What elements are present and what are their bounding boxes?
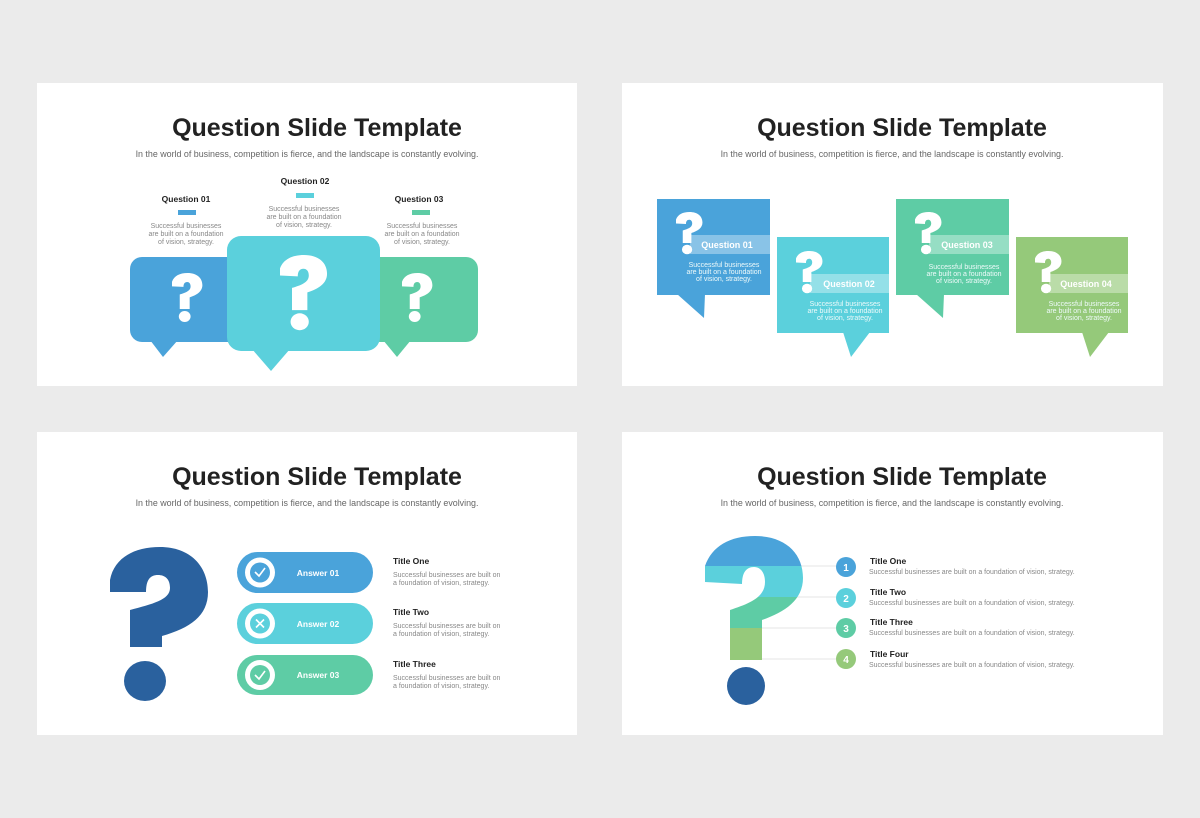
icon: segmented question mark	[705, 536, 803, 705]
pill: answer 01	[237, 552, 373, 593]
panel: three speech bubbles	[37, 83, 577, 386]
item 4: Successful businesses are built on a foundation of vision, strategy.	[869, 662, 1075, 669]
bubble: question 04: are built on a foundation	[1046, 308, 1122, 315]
pill: answer 01: Answer 01	[297, 568, 340, 578]
label: question 03: of vision, strategy.	[394, 239, 450, 246]
text: title three: a foundation of vision, strategy.	[393, 683, 489, 690]
panel: answers	[37, 432, 577, 735]
title: Question Slide Template	[757, 114, 1047, 142]
text: title three: Title Three	[393, 659, 436, 669]
subtitle: In the world of business, competition is fierce, and the landscape is constantly evolving.	[136, 149, 478, 159]
item 3: 3	[843, 624, 849, 635]
bubble: left blue	[130, 257, 240, 357]
text: title two: Successful businesses are built on	[393, 623, 500, 630]
label: question 03	[384, 194, 460, 246]
item 2	[836, 587, 1075, 608]
subtitle: In the world of business, competition is fierce, and the landscape is constantly evolving.	[721, 498, 1063, 508]
panel: segmented question mark	[622, 432, 1163, 735]
label: question 01	[148, 194, 224, 246]
item 3	[836, 617, 1075, 638]
icon: big question mark	[110, 547, 208, 701]
bubble: question 01: Successful businesses	[689, 262, 760, 269]
title: Question Slide Template	[172, 463, 462, 491]
label: question 02: of vision, strategy.	[276, 222, 332, 229]
text: title three	[393, 659, 500, 690]
panel: four square bubbles	[622, 83, 1163, 386]
bubble: question 01	[657, 199, 770, 318]
bubble: question 02: Successful businesses	[810, 301, 881, 308]
text: title one: Title One	[393, 556, 429, 566]
bubble: question 01: are built on a foundation	[686, 269, 762, 276]
bubble: question 01: Question 01	[701, 240, 753, 250]
bubble: question 04: Question 04	[1060, 279, 1112, 289]
item 2: 2	[843, 594, 849, 605]
text: title one	[393, 556, 500, 587]
pill: answer 03	[237, 655, 373, 695]
bubble: question 02: of vision, strategy.	[817, 315, 873, 322]
text: title one: a foundation of vision, strategy.	[393, 580, 489, 587]
label: question 01: of vision, strategy.	[158, 239, 214, 246]
item 3: Title Three	[870, 617, 913, 627]
bubble: center cyan	[227, 236, 380, 371]
pill: answer 02	[237, 603, 373, 644]
bubble: question 04: Successful businesses	[1049, 301, 1120, 308]
connector lines	[705, 566, 836, 659]
bubble: question 01: of vision, strategy.	[696, 276, 752, 283]
item 4: Title Four	[870, 649, 909, 659]
subtitle: In the world of business, competition is fierce, and the landscape is constantly evolving.	[136, 498, 478, 508]
item 4: 4	[843, 655, 849, 666]
item 3: Successful businesses are built on a foundation of vision, strategy.	[869, 630, 1075, 637]
label: question 03: Question 03	[395, 194, 444, 204]
pill: answer 02: Answer 02	[297, 619, 340, 629]
item 2: Title Two	[870, 587, 906, 597]
item 1: 1	[843, 563, 849, 574]
label: question 01: Question 01	[162, 194, 211, 204]
bubble: question 03: Successful businesses	[929, 264, 1000, 271]
text: title three: Successful businesses are built on	[393, 675, 500, 682]
bubble: question 03: are built on a foundation	[926, 271, 1002, 278]
title: Question Slide Template	[172, 114, 462, 142]
label: question 03: are built on a foundation	[384, 231, 460, 238]
bubble: question 02: are built on a foundation	[807, 308, 883, 315]
bubble: question 04: of vision, strategy.	[1056, 315, 1112, 322]
subtitle: In the world of business, competition is fierce, and the landscape is constantly evolving.	[721, 149, 1063, 159]
bubble: question 03: Question 03	[941, 240, 993, 250]
pill: answer 03: Answer 03	[297, 670, 340, 680]
bubble: question 03: of vision, strategy.	[936, 278, 992, 285]
text: title two: Title Two	[393, 607, 429, 617]
title: Question Slide Template	[757, 463, 1047, 491]
item 2: Successful businesses are built on a foundation of vision, strategy.	[869, 600, 1075, 607]
bubble: question 02	[777, 237, 889, 357]
item 1	[836, 556, 1075, 577]
text: title two: a foundation of vision, strategy.	[393, 631, 489, 638]
bubble: right green	[368, 257, 478, 357]
bubble: question 03	[896, 199, 1009, 318]
label: question 01: are built on a foundation	[148, 231, 224, 238]
item 1: Title One	[870, 556, 906, 566]
label: question 02	[266, 176, 342, 229]
label: question 03: Successful businesses	[387, 223, 458, 230]
label: question 02: Question 02	[281, 176, 330, 186]
text: title one: Successful businesses are built on	[393, 572, 500, 579]
bubble: question 02: Question 02	[823, 279, 875, 289]
label: question 02: are built on a foundation	[266, 214, 342, 221]
bubble: question 04	[1016, 237, 1128, 357]
text: title two	[393, 607, 500, 638]
item 4	[836, 649, 1075, 669]
item 1: Successful businesses are built on a foundation of vision, strategy.	[869, 569, 1075, 576]
label: question 02: Successful businesses	[269, 206, 340, 213]
label: question 01: Successful businesses	[151, 223, 222, 230]
